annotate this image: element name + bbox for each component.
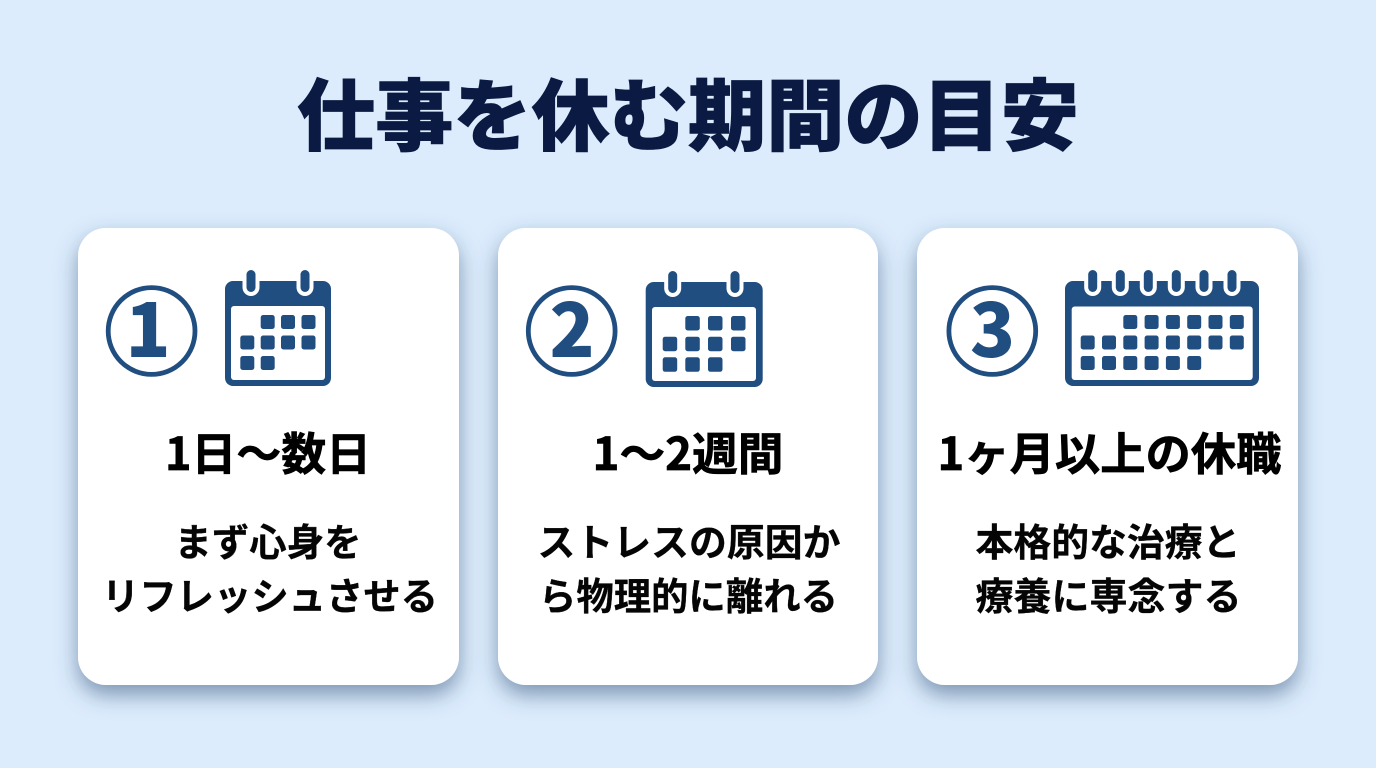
card description: ストレスの原因か <box>538 512 840 567</box>
card description <box>976 512 1242 621</box>
icon: calendar short <box>225 266 331 386</box>
number badge 1 <box>108 272 195 379</box>
panel: 1ヶ月以上の休職 <box>917 228 1298 685</box>
card heading: 1日〜数日 <box>165 418 371 483</box>
number badge 3 <box>949 272 1036 379</box>
card description: ら物理的に離れる <box>539 566 838 621</box>
card background <box>498 228 878 685</box>
icon: calendar long <box>1065 266 1259 386</box>
card description: 療養に専念する <box>976 566 1242 621</box>
card description: 本格的な治療と <box>976 512 1240 567</box>
panel: 1日〜数日 <box>78 228 459 685</box>
icon: calendar medium <box>646 267 763 387</box>
card description <box>102 512 438 621</box>
number badge 1: 1 <box>125 272 171 379</box>
card description: まず心身を <box>174 512 362 567</box>
card background <box>917 228 1298 685</box>
title: 仕事を休む期間の目安 <box>297 55 1079 167</box>
card description <box>538 512 840 621</box>
card heading: 1〜2週間 <box>592 418 784 483</box>
card heading: 1ヶ月以上の休職 <box>938 418 1282 483</box>
card background <box>78 228 459 685</box>
number badge 2 <box>528 272 615 379</box>
number badge 2: 2 <box>549 272 595 379</box>
panel: 1〜2週間 <box>498 228 878 685</box>
card description: リフレッシュさせる <box>102 566 438 621</box>
number badge 3: 3 <box>970 272 1015 379</box>
